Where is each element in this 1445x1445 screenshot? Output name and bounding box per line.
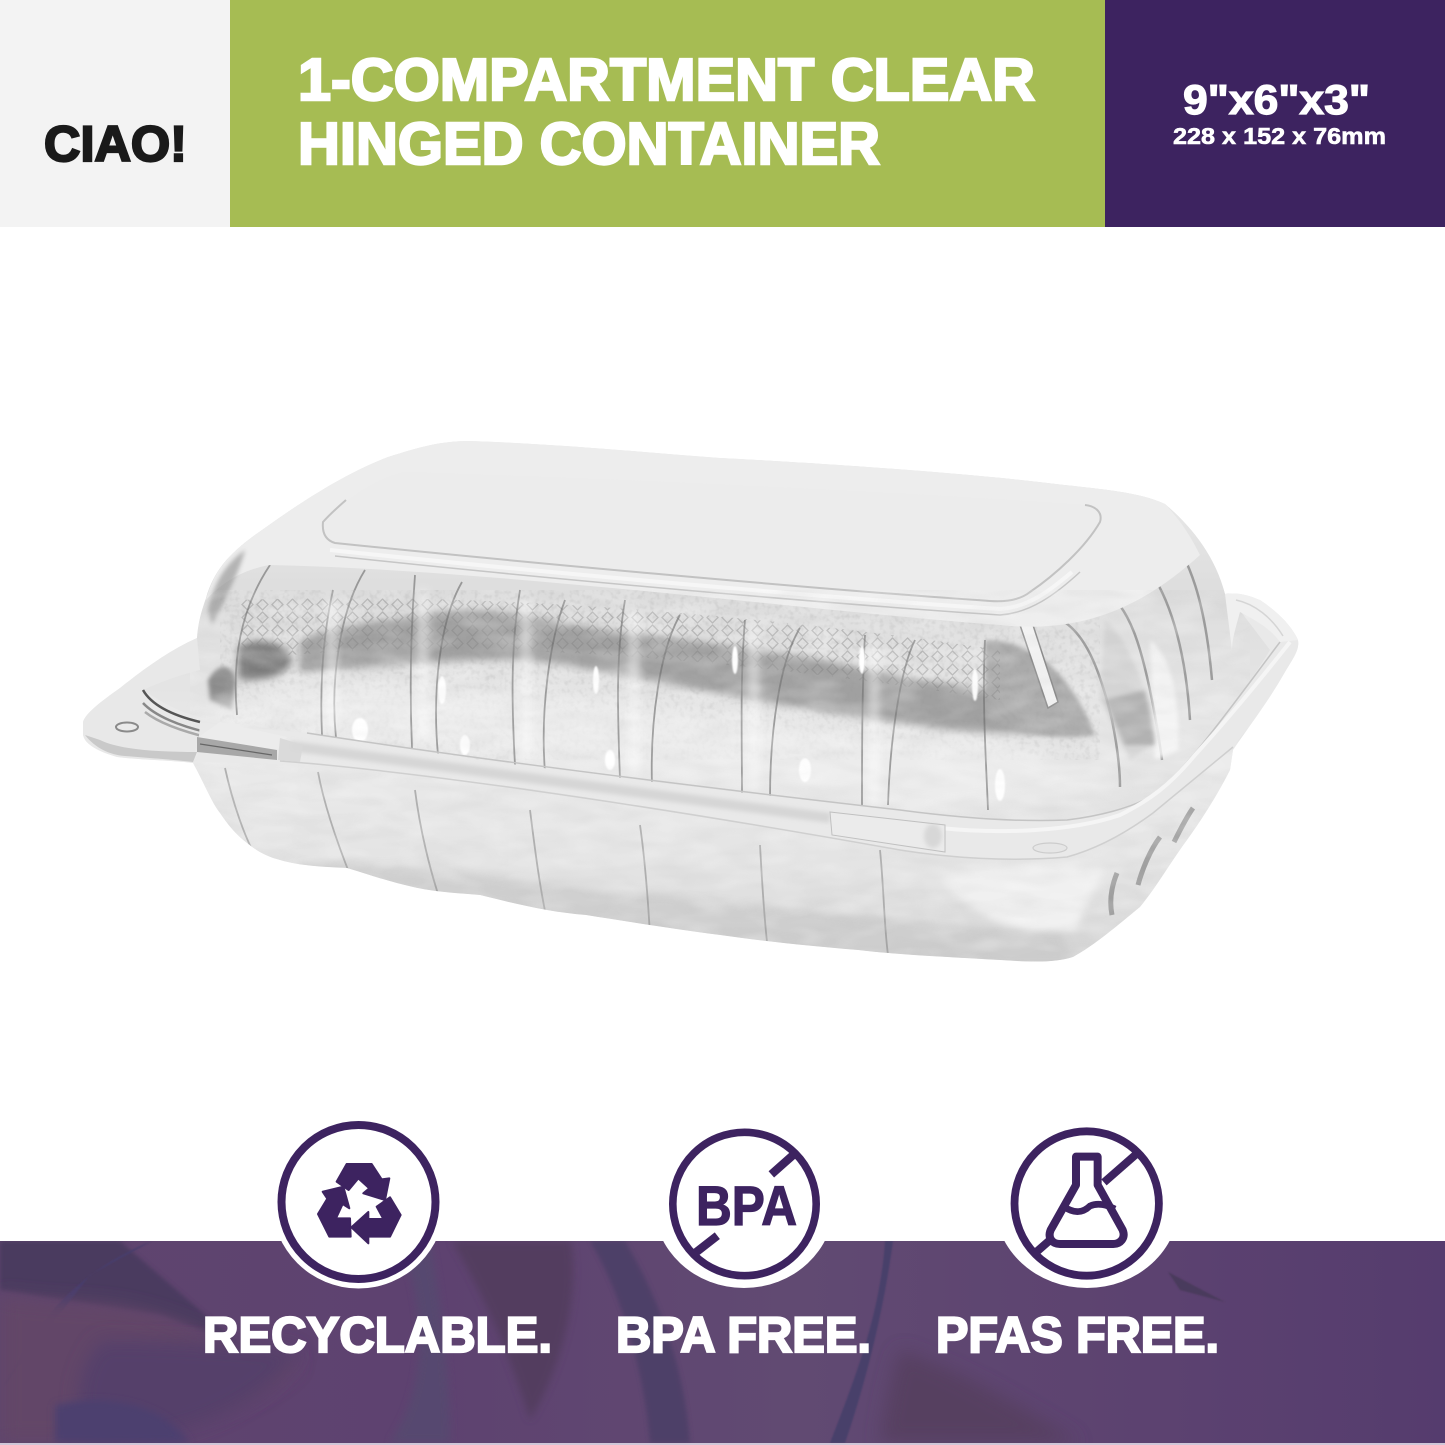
base ribs bbox=[225, 768, 888, 955]
background leaves bbox=[0, 1241, 1225, 1443]
label: BPA free: BPA FREE. bbox=[616, 1307, 871, 1363]
size panel bbox=[1105, 0, 1445, 227]
dark reflection right bbox=[985, 640, 1095, 737]
band bottom edge bbox=[0, 1443, 1445, 1445]
lid top surface bbox=[206, 522, 1200, 627]
base bright area bbox=[940, 863, 1105, 931]
flange edge bbox=[1236, 600, 1283, 636]
badge: recyclable bbox=[272, 1116, 445, 1288]
footer band bbox=[0, 1241, 1445, 1445]
front latch bbox=[830, 812, 945, 852]
hinge reflections bbox=[142, 689, 200, 736]
right corner ribs bbox=[1066, 564, 1214, 787]
brand name: CIAO! bbox=[44, 116, 187, 172]
label: PFAS free: PFAS FREE. bbox=[936, 1307, 1219, 1363]
lid inset edge bbox=[323, 500, 1101, 601]
dome ribs bbox=[236, 565, 988, 810]
tab underside bbox=[85, 735, 197, 762]
icon: flask with slash bbox=[1036, 1154, 1136, 1252]
icon text: BPA: BPA bbox=[696, 1174, 797, 1237]
title line 1: 1-COMPARTMENT CLEAR bbox=[298, 47, 1035, 113]
base bbox=[224, 768, 1195, 962]
fine mottling bbox=[220, 590, 1100, 760]
dome bbox=[197, 543, 1264, 810]
lid left lens bbox=[208, 550, 245, 625]
rim lower line bbox=[280, 747, 1233, 859]
latch bump bbox=[924, 824, 942, 848]
size in inches: 9"x6"x3" bbox=[1183, 76, 1370, 123]
badge: PFAS free bbox=[995, 1120, 1179, 1288]
container silhouette bbox=[83, 508, 1298, 952]
right corner dark bbox=[1105, 690, 1155, 745]
hinge mottled join bbox=[278, 738, 303, 762]
lid inset rim bbox=[330, 550, 1072, 609]
right corner shading bbox=[1100, 625, 1154, 758]
texture diamonds bbox=[240, 598, 1000, 700]
rim upper line bbox=[307, 642, 1280, 821]
dark reflection band bbox=[300, 611, 1060, 734]
glass mottling light bbox=[190, 590, 1250, 965]
right corner highlight bbox=[1150, 640, 1178, 760]
rim shadow band bbox=[290, 746, 830, 818]
title line 2: HINGED CONTAINER bbox=[298, 111, 880, 177]
header band bbox=[0, 0, 1445, 227]
dark reflection far left bbox=[208, 667, 236, 710]
bright rib glints bbox=[322, 590, 884, 758]
badge: BPA free bbox=[654, 1120, 834, 1288]
size in millimetres: 228 x 152 x 76mm bbox=[1173, 123, 1386, 149]
label: recyclable: RECYCLABLE. bbox=[203, 1307, 552, 1363]
corner slot bbox=[1020, 622, 1058, 708]
glass mottling dark bbox=[1024, 902, 1031, 903]
rim hole bbox=[1033, 843, 1067, 853]
icon: slash through BPA bbox=[696, 1153, 795, 1252]
brand panel bbox=[0, 0, 230, 227]
hinge latch bbox=[197, 722, 287, 760]
dark reflection left bbox=[238, 641, 292, 680]
bright specks bbox=[352, 646, 1005, 801]
base shadow band bbox=[300, 862, 1075, 965]
title panel bbox=[230, 0, 1105, 227]
product image: clear hinged container bbox=[80, 436, 1305, 975]
rim middle line bbox=[940, 642, 1290, 831]
tab hole bbox=[116, 722, 138, 732]
left tab flange bbox=[190, 638, 200, 668]
front rim bbox=[199, 722, 770, 796]
lid lower edge bbox=[335, 556, 1080, 615]
light lower dome area bbox=[212, 686, 1043, 760]
base right corner ribs bbox=[1111, 808, 1193, 915]
icon: recycling arrows bbox=[318, 1164, 401, 1243]
lid inset panel bbox=[323, 472, 1101, 601]
right flange bbox=[1225, 593, 1298, 650]
